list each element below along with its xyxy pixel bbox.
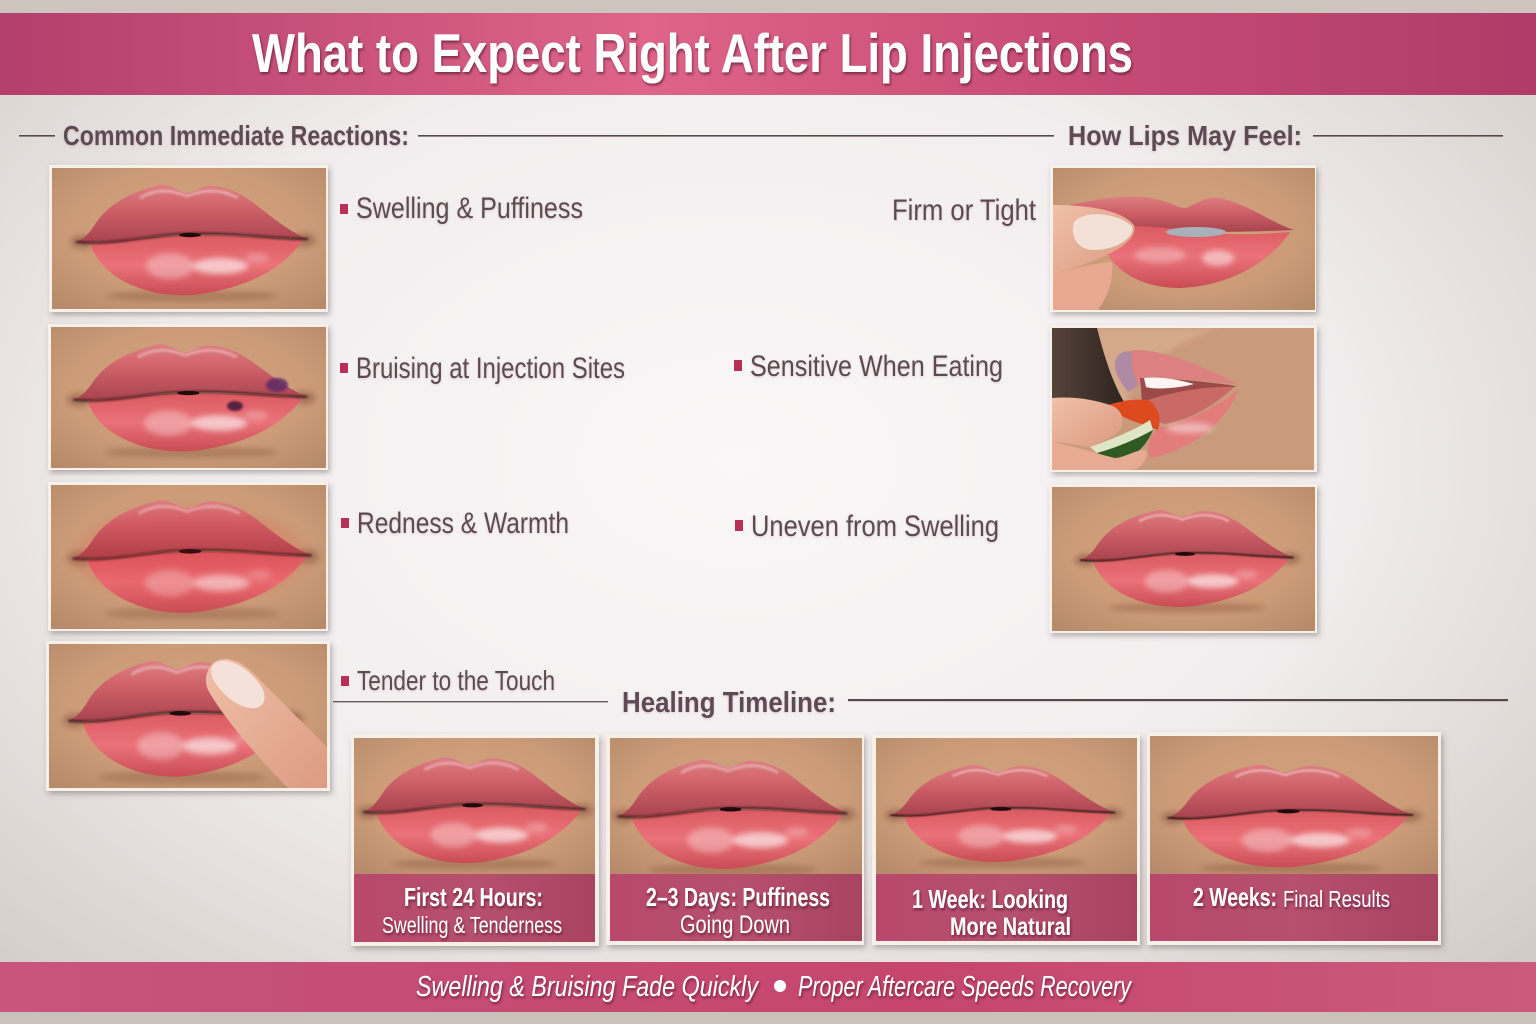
heading rule: timeline right: [848, 699, 1508, 701]
label: bruising: Bruising at Injection Sites: [356, 352, 625, 385]
caption: first 24 hours: First 24 Hours:: [404, 882, 543, 912]
label: tender: Tender to the Touch: [357, 665, 555, 696]
heading rule: right: [1313, 135, 1503, 137]
photo: fingers pinching lips: [1050, 165, 1316, 312]
label: firm or tight: Firm or Tight: [892, 194, 1037, 227]
bullet: sensitive: [734, 360, 742, 371]
timeline card: 2 weeks: [1147, 732, 1441, 945]
caption detail: more natural: More Natural: [950, 913, 1071, 941]
bullet: uneven: [735, 520, 743, 531]
list: immediate reactions: [340, 192, 625, 696]
caption: 2 weeks: 2 Weeks:: [1193, 882, 1277, 912]
heading rule: centre: [418, 135, 1054, 137]
timeline card: 2-3 days: [606, 734, 864, 945]
heading: common immediate reactions: Common Immediate Reactions:: [63, 120, 409, 151]
label: uneven: Uneven from Swelling: [751, 510, 999, 543]
list: how lips may feel: [734, 194, 1037, 543]
heading: healing timeline: Healing Timeline:: [622, 687, 836, 719]
footer text: aftercare: Proper Aftercare Speeds Recovery: [798, 971, 1132, 1003]
bullet: bruising: [340, 363, 348, 373]
caption detail: swelling and tenderness: Swelling & Tenderness: [382, 912, 562, 938]
photo: eating with sensitive lips: [1050, 325, 1317, 472]
photo: uneven lips: [1049, 484, 1317, 633]
heading rule: common reactions left: [19, 135, 55, 137]
footer band: [0, 962, 1536, 1012]
label: sensitive: Sensitive When Eating: [750, 350, 1003, 383]
caption detail: going down: Going Down: [680, 911, 790, 939]
bullet: redness: [341, 518, 349, 528]
footer bullet: [774, 980, 786, 992]
bullet: tender: [341, 676, 349, 686]
caption: 1 week: 1 Week: Looking: [912, 884, 1068, 914]
label: swelling: Swelling & Puffiness: [356, 192, 583, 225]
heading rule: timeline left: [333, 701, 608, 702]
caption detail: final results: Final Results: [1283, 886, 1390, 912]
photo: red lips: [48, 482, 328, 631]
heading: how lips may feel: How Lips May Feel:: [1068, 120, 1302, 151]
timeline card: 1 week: [872, 734, 1140, 945]
bullet: swelling: [340, 204, 348, 214]
caption: 2-3 days: 2–3 Days: Puffiness: [646, 882, 830, 912]
title: What to Expect Right After Lip Injections: [252, 22, 1133, 84]
timeline card: first 24 hours: [351, 734, 599, 946]
label: redness: Redness & Warmth: [357, 507, 569, 540]
photo: finger touching lips: [46, 641, 330, 791]
header band: [0, 13, 1536, 95]
footer bottom strip: [0, 1012, 1536, 1024]
photo: bruised lips: [48, 324, 328, 470]
photo: swelling lips: [49, 165, 328, 312]
header top strip: [0, 0, 1536, 13]
footer text: bruising fades: Swelling & Bruising Fade Quickly: [416, 971, 759, 1003]
